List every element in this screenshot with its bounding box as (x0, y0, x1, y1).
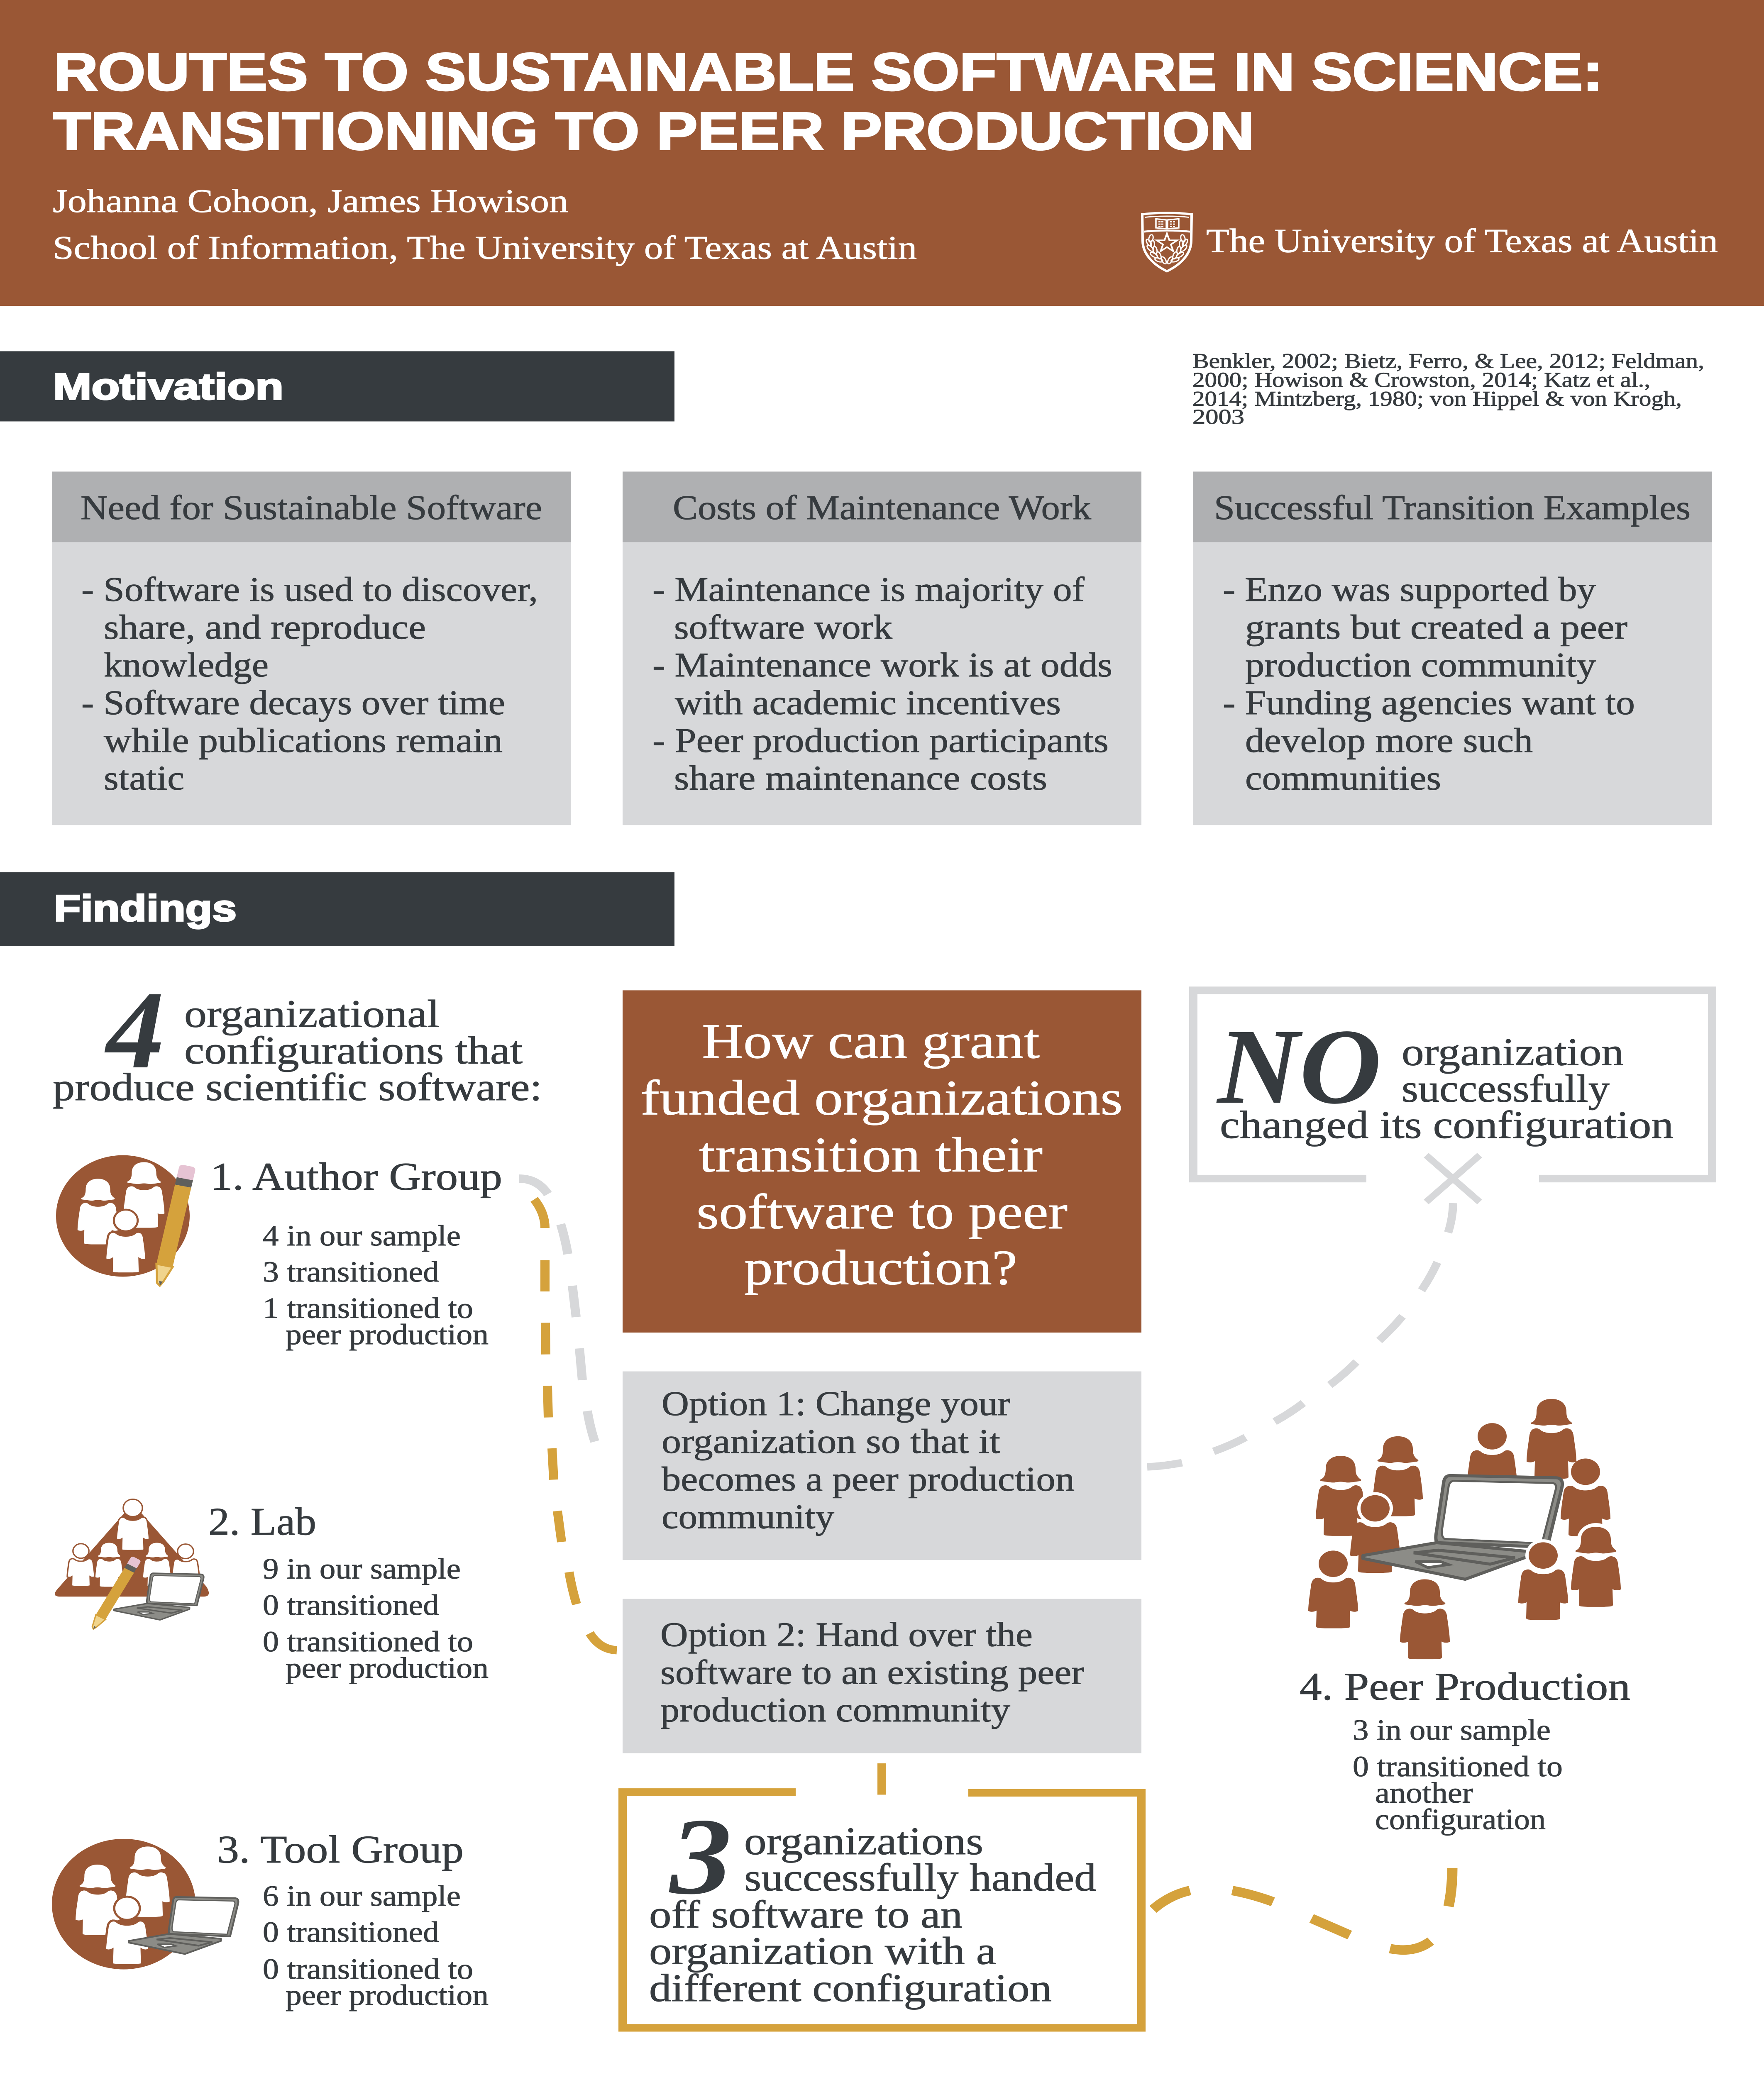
callout: three organizations handed off: successfully handed (744, 1856, 1096, 1899)
card body text: - Maintenance work is at odds (652, 645, 1112, 684)
intro: four organizational configurations: 4 (105, 969, 164, 1091)
panel: central question: transition their (699, 1127, 1043, 1182)
title (53, 42, 1603, 161)
card body text: software work (674, 608, 892, 646)
panel: option 2 (623, 1599, 1141, 1753)
callout: three organizations handed off: off software to an (649, 1893, 963, 1936)
block: 2. lab: 2. Lab (208, 1500, 316, 1543)
authors and affiliation (53, 183, 917, 266)
icon: tool group (52, 1839, 238, 1969)
card body text: grants but created a peer (1245, 608, 1627, 646)
block: 3. tool group: 0 transitioned (263, 1915, 439, 1948)
callout: no organization changed (1193, 990, 1712, 1179)
arrow: gold connector from option 2 to hand-off box (877, 1763, 886, 1795)
callout: three organizations handed off (623, 1792, 1141, 2028)
card heading: Successful Transition Examples (1214, 488, 1691, 527)
authors and affiliation: Johanna Cohoon, James Howison (53, 183, 568, 220)
university wordmark: The University of Texas at Austin (1206, 222, 1718, 259)
heading: Findings (0, 872, 674, 946)
icon: university shield (1142, 213, 1192, 271)
panel: central question: software to peer (696, 1184, 1068, 1239)
card body text: - Funding agencies want to (1223, 683, 1635, 722)
card body text: - Enzo was supported by (1223, 570, 1596, 608)
panel: option 1 (623, 1372, 1141, 1560)
icon: lab (55, 1499, 209, 1631)
card heading: Need for Sustainable Software (81, 488, 542, 527)
block: 4. peer production: 4. Peer Production (1300, 1665, 1630, 1708)
block: 3. tool group (217, 1828, 489, 2011)
callout: no organization changed: changed its configuration (1220, 1103, 1674, 1147)
callout: three organizations handed off: organization with a (649, 1929, 996, 1973)
block: 3. tool group: 0 transitioned to (263, 1953, 473, 1985)
icon: grey x mark (1426, 1155, 1480, 1202)
title: TRANSITIONING TO PEER PRODUCTION (53, 101, 1254, 161)
block: 3. tool group: 6 in our sample (263, 1879, 461, 1912)
card body text (652, 570, 1112, 797)
icon: author group (56, 1155, 196, 1287)
title: ROUTES TO SUSTAINABLE SOFTWARE IN SCIENCE: (54, 42, 1603, 102)
card body text: with academic incentives (675, 683, 1061, 722)
panel: option 2: Option 2: Hand over the (660, 1615, 1033, 1654)
panel: option 2: production community (660, 1691, 1010, 1729)
arrow: grey dashed route from author group to option 1 (519, 1179, 595, 1442)
card body text: share, and reproduce (104, 608, 426, 646)
card body text: share maintenance costs (674, 759, 1047, 797)
heading: Motivation: Motivation (53, 366, 283, 407)
card body text: - Peer production participants (652, 721, 1109, 759)
card body text: while publications remain (104, 721, 503, 759)
block: 4. peer production: configuration (1375, 1803, 1546, 1836)
panel: need for sustainable software (52, 471, 571, 825)
card body text (81, 570, 538, 797)
panel: option 1: becomes a peer production (662, 1460, 1075, 1498)
card body text: production community (1245, 645, 1596, 684)
block: 1. author group: peer production (286, 1318, 489, 1351)
block: 1. author group: 1. Author Group (210, 1155, 502, 1198)
card body text (1223, 570, 1635, 797)
heading: Findings: Findings (54, 887, 237, 929)
intro: four organizational configurations: configurations that (184, 1029, 523, 1072)
callout: three organizations handed off: different configuration (649, 1966, 1052, 2010)
callout: three organizations handed off: organizations (744, 1820, 983, 1863)
intro: four organizational configurations (53, 969, 542, 1109)
card body text: knowledge (104, 645, 269, 684)
block: 4. peer production (1300, 1665, 1630, 1836)
references (1192, 349, 1704, 429)
card body text: - Maintenance is majority of (652, 570, 1085, 608)
heading: Motivation (0, 351, 674, 421)
arrow: gold dashed route from hand-off box to peer production (1153, 1868, 1452, 1950)
references: Benkler, 2002; Bietz, Ferro, & Lee, 2012; Feldman, (1192, 349, 1704, 373)
card body text: develop more such (1245, 721, 1533, 759)
block: 2. lab: 0 transitioned to (263, 1625, 473, 1658)
panel: option 1: organization so that it (662, 1422, 1000, 1460)
header banner (0, 0, 1764, 306)
references: 2000; Howison & Crowston, 2014; Katz et al., (1192, 368, 1650, 392)
block: 1. author group: 3 transitioned (263, 1255, 439, 1288)
card body text: static (104, 759, 184, 797)
block: 1. author group: 4 in our sample (263, 1219, 461, 1252)
authors and affiliation: School of Information, The University of Texas at Austin (53, 230, 917, 266)
block: 4. peer production: 3 in our sample (1353, 1713, 1551, 1746)
card heading: Costs of Maintenance Work (673, 488, 1091, 527)
block: 1. author group: 1 transitioned to (263, 1291, 473, 1324)
panel: central question: How can grant (702, 1013, 1040, 1069)
callout: no organization changed: organization (1402, 1030, 1624, 1074)
arrow: gold dashed route from author group to option 2 (534, 1199, 617, 1650)
icon: peer production group (1308, 1399, 1621, 1659)
card body text: communities (1245, 759, 1441, 797)
card body text: - Software decays over time (81, 683, 505, 722)
callout: no organization changed: successfully (1402, 1067, 1610, 1110)
callout: no organization changed: NO (1216, 1006, 1381, 1126)
block: 4. peer production: another (1375, 1776, 1473, 1809)
callout: three organizations handed off: 3 (668, 1796, 732, 1917)
block: 4. peer production: 0 transitioned to (1353, 1750, 1563, 1782)
intro: four organizational configurations: organizational (184, 992, 440, 1035)
block: 3. tool group: 3. Tool Group (217, 1828, 464, 1871)
block: 2. lab: peer production (286, 1651, 489, 1684)
references: 2014; Mintzberg, 1980; von Hippel & von Krogh, (1192, 387, 1682, 410)
panel: option 1: Option 1: Change your (662, 1384, 1010, 1423)
panel: costs of maintenance work (623, 471, 1141, 825)
panel: option 2: software to an existing peer (660, 1653, 1084, 1691)
block: 1. author group (210, 1155, 502, 1351)
block: 3. tool group: peer production (286, 1978, 489, 2011)
arrow: grey dashed route from option 1 to the no-change box (1147, 1203, 1453, 1467)
panel: successful transition examples (1193, 471, 1712, 825)
panel: central question (623, 990, 1141, 1333)
block: 2. lab: 0 transitioned (263, 1588, 439, 1621)
block: 2. lab: 9 in our sample (263, 1552, 461, 1585)
panel: central question: funded organizations (640, 1070, 1123, 1125)
references: 2003 (1192, 405, 1244, 429)
card body text: - Software is used to discover, (81, 570, 538, 608)
block: 2. lab (208, 1500, 489, 1684)
panel: central question: production? (744, 1240, 1017, 1295)
panel: option 1: community (662, 1497, 834, 1536)
intro: four organizational configurations: produce scientific software: (53, 1065, 542, 1109)
